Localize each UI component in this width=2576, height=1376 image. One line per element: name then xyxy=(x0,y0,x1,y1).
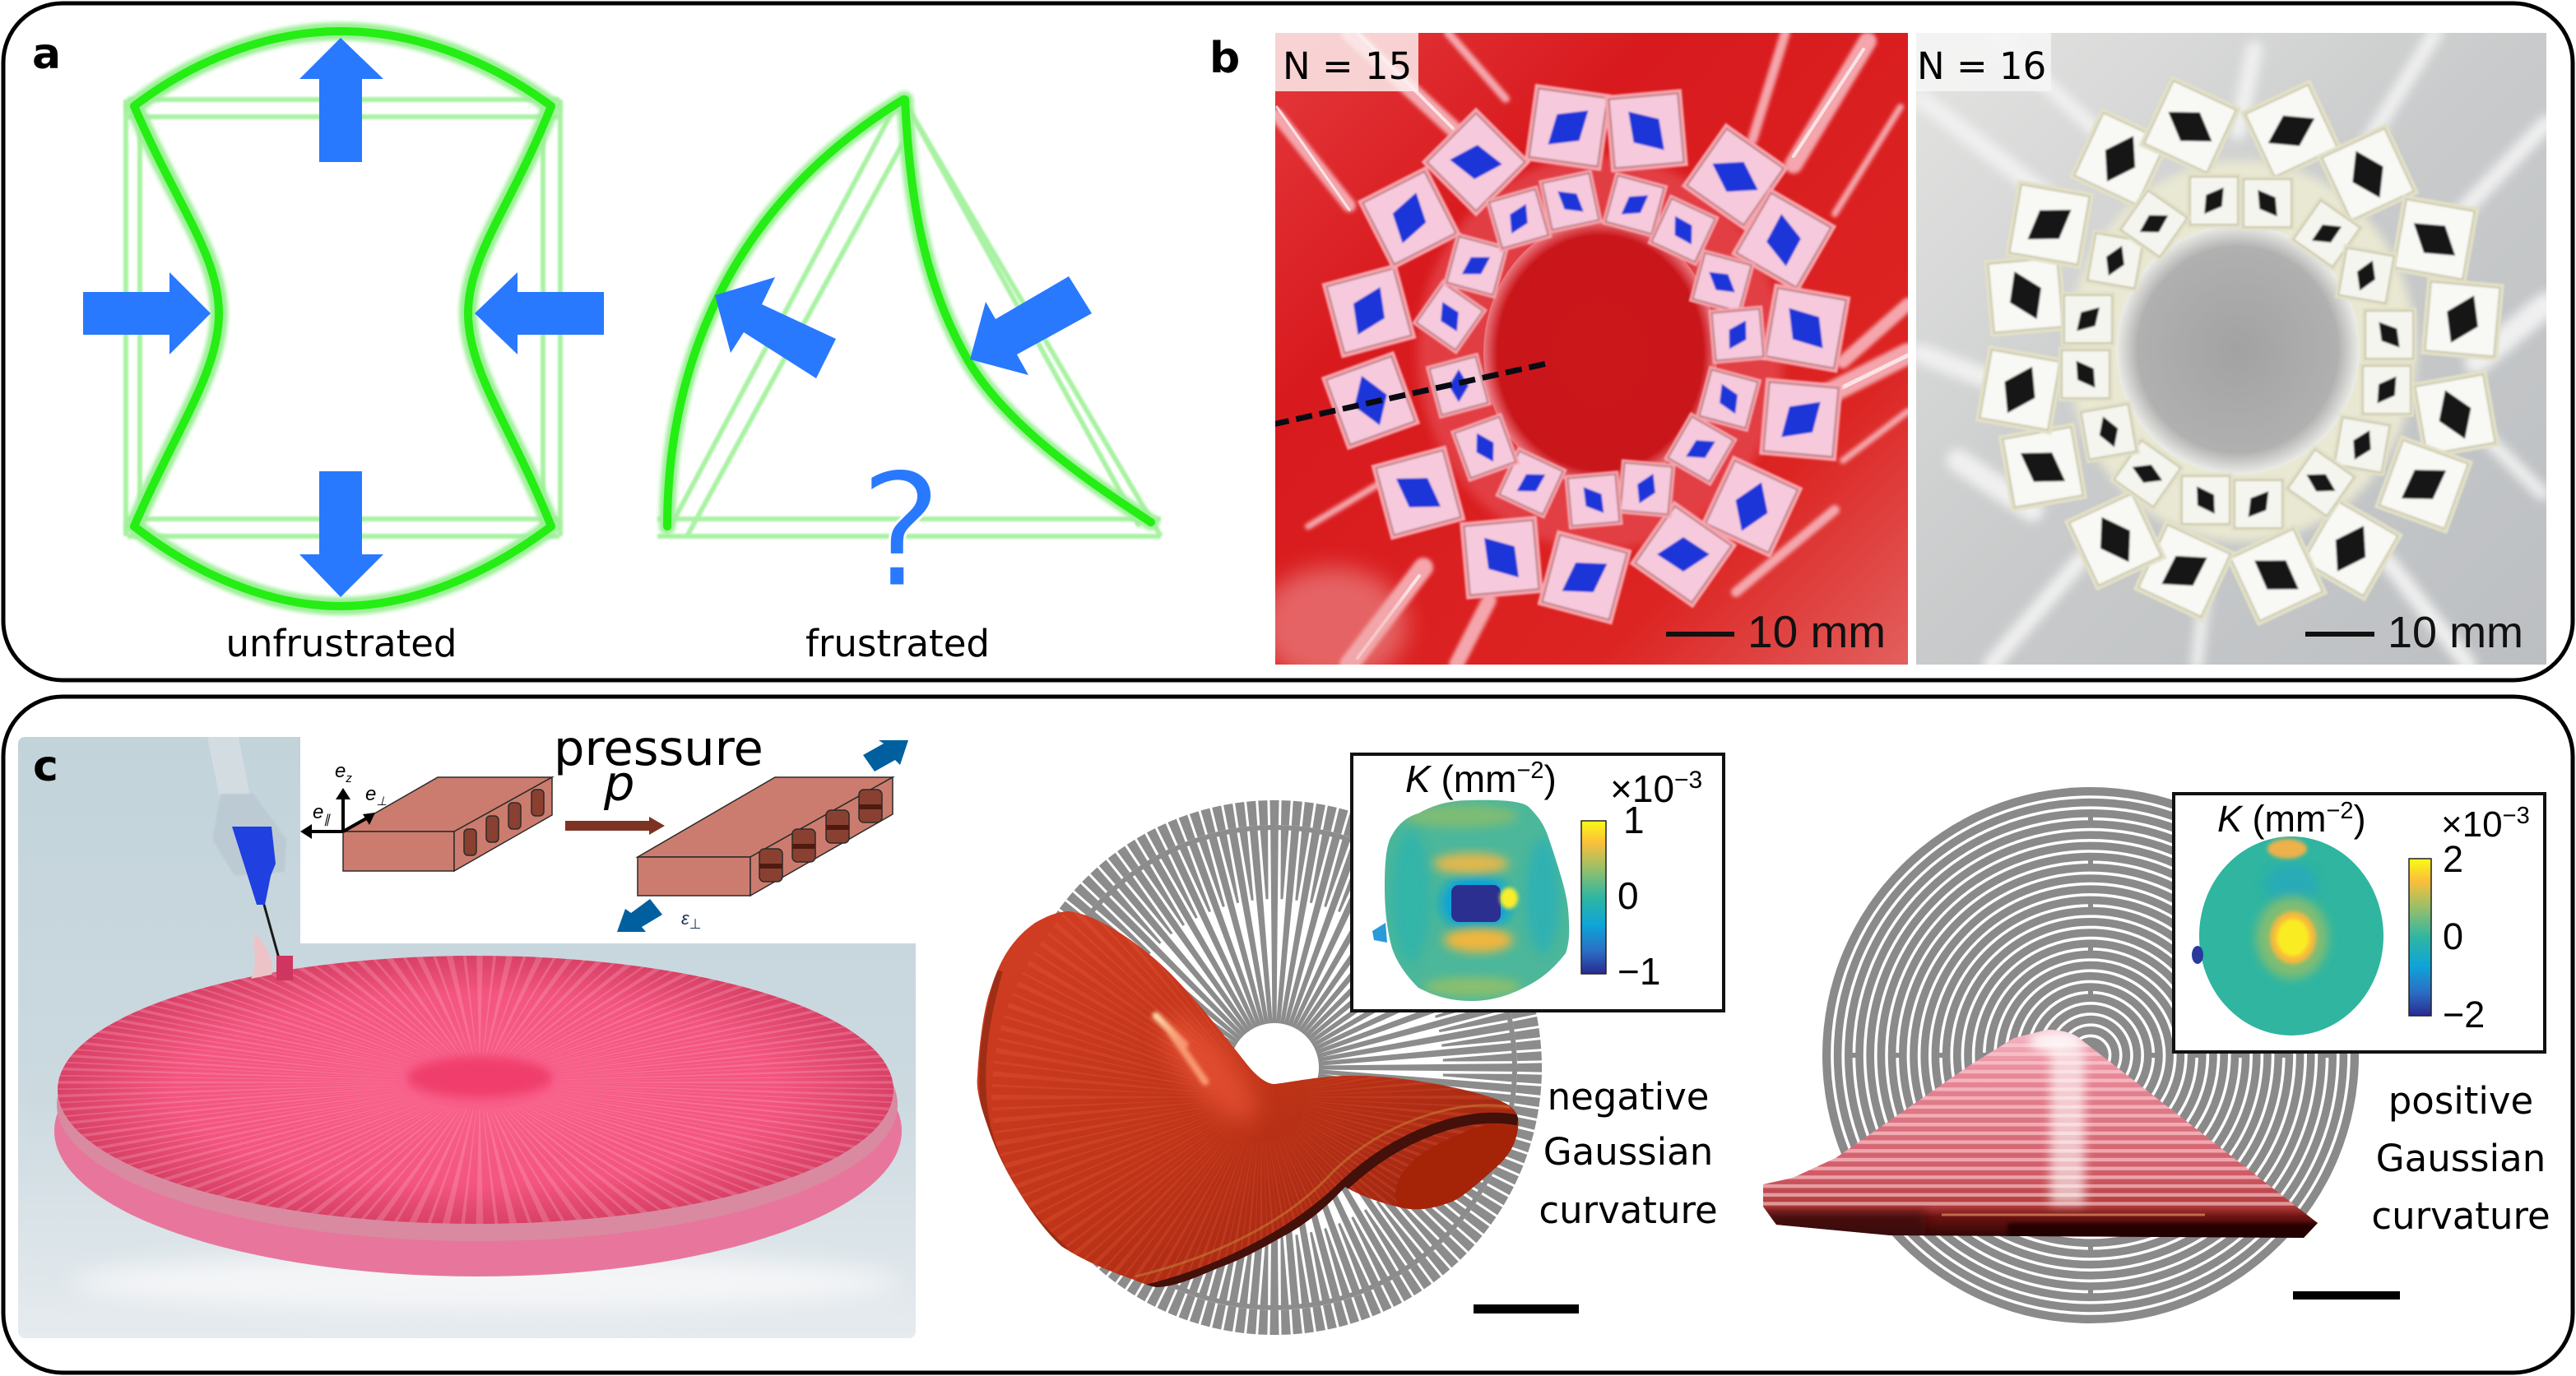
scale bar cone xyxy=(2293,1291,2400,1300)
label: N = 15 xyxy=(1275,33,1418,91)
axis labels: ∥ xyxy=(323,813,331,827)
curvature title: K (mm xyxy=(1405,757,1516,800)
question mark: ? xyxy=(859,440,943,623)
panel: a and b frame xyxy=(3,3,2573,680)
panel label c: c xyxy=(33,742,58,791)
tiles: outer ring xyxy=(1321,84,1850,625)
label: positive Gaussian curvature: curvature xyxy=(2371,1194,2550,1238)
strain label: ε xyxy=(681,908,689,929)
axis labels: e xyxy=(365,783,376,805)
arrow: right xyxy=(475,272,604,354)
axis labels xyxy=(313,760,387,827)
arrow: bottom xyxy=(299,471,383,597)
colour bar labels xyxy=(2443,838,2485,1035)
axes xyxy=(300,788,375,839)
heat map xyxy=(1372,798,1571,1003)
pattern: concentric cuts xyxy=(1822,787,2359,1323)
panel label a: a xyxy=(32,30,61,79)
panel label b: b xyxy=(1209,34,1240,83)
right brick xyxy=(638,777,893,896)
strain label: ⊥ xyxy=(689,916,701,932)
scale bar: 10 mm xyxy=(1666,632,1734,637)
soft robot: saddle xyxy=(977,911,1519,1287)
label: N = 16: N = 16 xyxy=(1917,44,2046,88)
label: positive Gaussian curvature: Gaussian xyxy=(2376,1137,2546,1180)
scale label red: 10 mm xyxy=(1748,606,1886,657)
colour bar xyxy=(2409,859,2431,1016)
curvature title: −2 xyxy=(1516,757,1544,784)
label: N = 15: N = 15 xyxy=(1283,44,1412,88)
inset: pressure schematic xyxy=(300,720,916,943)
colour bar labels xyxy=(1618,799,1660,993)
tiles: outer ring xyxy=(1975,76,2504,626)
arrow: left xyxy=(83,272,211,354)
scale bar: 10 mm xyxy=(2305,632,2374,637)
disk rim xyxy=(54,985,902,1276)
curvature title: −2 xyxy=(2326,798,2354,824)
syringe xyxy=(207,737,293,980)
pressure text: pressure xyxy=(554,720,764,776)
colour bar labels: −1 xyxy=(1618,950,1660,993)
arrow: top xyxy=(299,38,383,162)
label: positive Gaussian curvature: positive xyxy=(2388,1079,2533,1123)
photo: N = 15 ring on red film xyxy=(1259,33,1908,683)
axis labels: e xyxy=(313,801,323,823)
exponent: ×10 xyxy=(2441,804,2503,845)
photo: N = 16 ring on clear film xyxy=(1916,33,2546,665)
dashed section line xyxy=(1273,364,1547,424)
left brick xyxy=(343,777,552,871)
axis labels: z xyxy=(345,771,352,785)
curvature title: ) xyxy=(1544,757,1557,800)
tiles: inner ring xyxy=(1412,169,1767,530)
arrow: strain down xyxy=(617,899,662,932)
scale bar saddle xyxy=(1474,1304,1579,1313)
photo: inflated disk with syringe xyxy=(5,737,954,1338)
heat map xyxy=(2192,836,2383,1035)
diagram: frustrated green triangle xyxy=(657,100,1161,623)
scale label grey: 10 mm xyxy=(2388,608,2523,657)
exponent: ×10 xyxy=(1610,767,1674,810)
p symbol: p xyxy=(603,755,634,812)
colour bar labels: 0 xyxy=(2443,915,2463,957)
colour bar xyxy=(1581,821,1606,974)
disk top xyxy=(58,956,893,1224)
colour bar labels: 0 xyxy=(1618,874,1639,917)
inset: negative curvature map xyxy=(1352,754,1724,1011)
inset: positive curvature map xyxy=(2174,794,2545,1052)
axis labels: e xyxy=(335,760,346,782)
arrow: left normal xyxy=(715,277,836,378)
tiles: inner ring xyxy=(2058,174,2416,531)
arrow: pressure xyxy=(565,817,665,835)
pattern: radial cuts xyxy=(979,772,1570,1363)
colour bar labels: 1 xyxy=(1623,799,1645,841)
curvature title: ) xyxy=(2354,798,2366,840)
label: negative Gaussian curvature: Gaussian xyxy=(1543,1130,1713,1174)
arrow: strain up xyxy=(863,740,908,771)
label: frustrated: frustrated xyxy=(805,622,990,665)
exponent: −3 xyxy=(2503,803,2530,829)
colour bar labels: 2 xyxy=(2443,838,2463,880)
soft robot: cone xyxy=(1761,1028,2320,1240)
axis labels: ⊥ xyxy=(376,795,387,808)
colour bar labels: −2 xyxy=(2443,994,2485,1035)
exponent: −3 xyxy=(1674,767,1702,794)
diagram: unfrustrated green rectangle xyxy=(83,31,604,606)
arrow: right normal xyxy=(970,276,1092,375)
panel: c frame xyxy=(3,697,2573,1373)
label: negative Gaussian curvature: negative xyxy=(1548,1075,1709,1119)
label: negative Gaussian curvature: curvature xyxy=(1539,1188,1718,1232)
curvature title: K (mm xyxy=(2217,798,2326,840)
label: unfrustrated: unfrustrated xyxy=(226,622,457,665)
